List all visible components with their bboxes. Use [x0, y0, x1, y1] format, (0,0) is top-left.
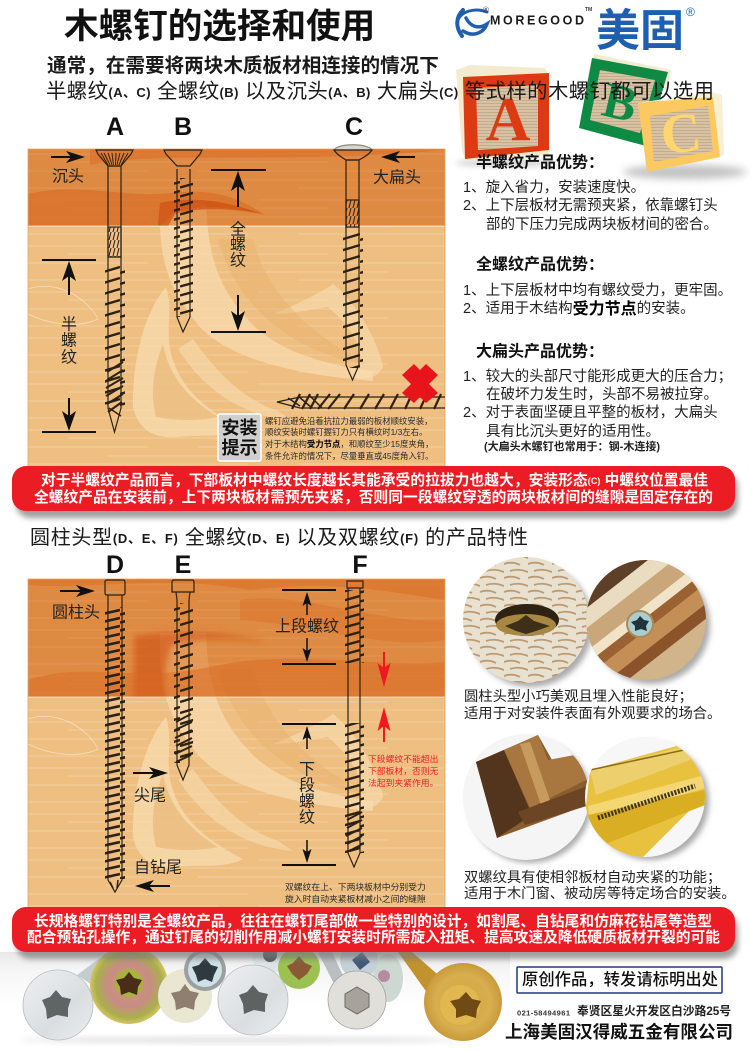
text: flat head advantages: 在破坏力发生时，头部不易被拉穿。 — [486, 386, 718, 403]
photo: screw in plywood — [586, 560, 714, 688]
screw head: back blue silver — [340, 941, 378, 979]
screw labels D E F: E — [175, 551, 191, 579]
callout: sharp tip — [133, 767, 168, 804]
photo: assorted screw heads — [0, 937, 510, 1043]
horizontal screw (wrong installation) — [277, 394, 445, 409]
text: install tip: 条件允许的情况下，尽量垂直或45度角入钉。 — [265, 451, 433, 461]
text: half thread advantages: 部的下压力完成两块板材间的密合。 — [486, 215, 718, 233]
callout: cylinder head — [52, 585, 100, 622]
text: half thread advantages: 2、上下层板材无需预夹紧，依靠螺钉头 — [463, 196, 718, 214]
dimension: half thread: 纹 — [61, 348, 77, 366]
text: half thread advantages — [463, 152, 718, 233]
section heading 2: 圆柱头型(D、E、F) 全螺纹(D、E) 以及双螺纹(F) 的产品特性 — [30, 526, 528, 549]
screw C, flat head — [334, 145, 372, 380]
screw labels A B C — [106, 113, 363, 141]
text: double thread caption: 适用于木门窗、被动房等特定场合的安装。 — [464, 884, 736, 902]
text: red warning — [368, 753, 439, 788]
dimension: half thread: 半 — [61, 316, 77, 334]
icon: logo swirl — [457, 10, 487, 36]
illustration: toy alphabet blocks: A — [486, 86, 531, 154]
panel: wood diagram, cylinder head screws — [28, 579, 445, 909]
screw labels A B C: A — [106, 113, 124, 141]
icon: red cross — [402, 364, 438, 403]
arrows: red clamping arrows — [378, 652, 390, 742]
screw F, double thread — [345, 581, 364, 867]
screw: gold wafer head — [393, 945, 502, 1041]
screw head: hex socket — [328, 971, 386, 1029]
text: cylinder head caption — [464, 688, 721, 722]
screw E — [172, 580, 194, 780]
wood background — [28, 149, 445, 479]
text: flat head advantages: 1、较大的头部尺寸能形成更大的压合力； — [463, 367, 732, 385]
panel: wood diagram, countersunk and flat head screws — [28, 145, 445, 479]
screw head: silver yellow — [158, 969, 212, 1023]
wood background — [28, 579, 445, 909]
photo: wooden frame corner — [463, 734, 592, 863]
dimension: lower thread: 段 — [299, 776, 315, 794]
block B — [579, 54, 671, 146]
screw head: small green — [278, 947, 320, 989]
text: flat head advantages — [463, 342, 732, 453]
callout banner: thread notes — [12, 466, 738, 518]
illustration: toy alphabet blocks — [455, 54, 747, 179]
dimension: upper thread — [275, 590, 339, 664]
text: flat head advantages: 2、对于表面坚硬且平整的板材，大扁头 — [463, 403, 718, 421]
callout: flat head arrow — [373, 151, 421, 186]
text: company contact — [505, 1004, 733, 1042]
text: full thread advantages — [463, 254, 732, 318]
title: 木螺钉的选择和使用 — [64, 8, 375, 46]
screw head: silver left — [23, 970, 93, 1040]
text: double thread note — [285, 881, 426, 904]
text: cylinder head caption: 圆柱头型小巧美观且埋入性能良好； — [464, 688, 693, 705]
screw D — [105, 580, 125, 892]
text: full thread advantages: 全螺纹产品优势： — [476, 254, 604, 274]
callout: cylinder head: 圆柱头 — [52, 604, 100, 622]
screw labels A B C: C — [345, 113, 363, 141]
dimension: full thread: 全 — [230, 220, 246, 238]
logo Chinese name: 美固 — [596, 6, 684, 56]
screw head: back green silver — [373, 954, 403, 1002]
callout: countersunk arrow — [51, 151, 85, 186]
logo registered mark small: ® — [483, 6, 489, 14]
dimension: full thread: 纹 — [230, 252, 246, 270]
photo: yellow timber with double thread screw — [585, 737, 709, 860]
screw head: back silver — [252, 937, 288, 973]
logo: Moregood — [457, 5, 695, 56]
block A — [456, 65, 549, 160]
text: red warning: 下部板材，否则无 — [368, 765, 439, 776]
callout banner: long screw notes: 长规格螺钉特别是全螺纹产品，往往在螺钉尾部做一些特别的设计，如割尾、自钻尾和仿麻花钻尾等造型 — [34, 912, 712, 930]
photo: recessed screw in cream wood — [463, 557, 593, 687]
callout: countersunk arrow: 沉头 — [52, 168, 84, 186]
text: full thread advantages: 2、适用于木结构受力节点的安装。 — [463, 298, 695, 318]
screw labels D E F: F — [352, 551, 368, 579]
dimension: full thread: 螺 — [230, 236, 246, 254]
intro line 2: 半螺纹(A、C) 全螺纹(B) 以及沉头(A、B) 大扁头(C) 等式样的木螺钉都可以选用 — [46, 80, 714, 103]
text: half thread advantages: 半螺纹产品优势： — [476, 152, 604, 172]
dimension: upper thread: 上段螺纹 — [275, 618, 339, 636]
callout: flat head arrow: 大扁头 — [373, 168, 421, 186]
callout: sharp tip: 尖尾 — [134, 786, 166, 804]
text: double thread note: 双螺纹在上、下两块板材中分别受力 — [285, 881, 426, 892]
callout: self-drilling tip — [134, 858, 182, 892]
dimension: lower thread: 螺 — [299, 792, 315, 810]
screw labels D E F — [106, 551, 368, 579]
callout banner: thread notes: 对于半螺纹产品而言，下部板材中螺纹长度越长其能承受的拉拔力也越大，安装形态(C) 中螺纹位置最佳 — [41, 471, 708, 489]
text: cylinder head caption: 适用于对安装件表面有外观要求的场合。 — [464, 705, 721, 722]
text: half thread advantages: 1、旋入省力，安装速度快。 — [463, 179, 645, 196]
logo registered mark: ® — [686, 5, 695, 19]
dimension: lower thread — [282, 724, 336, 865]
callout: install tip badge: 提示 — [222, 437, 258, 458]
text: double thread note: 旋入时自动夹紧板材减小之间的缝隙 — [285, 893, 426, 904]
text: red warning: 法起到夹紧作用。 — [368, 777, 438, 788]
text: double thread caption — [464, 869, 736, 902]
callout banner: long screw notes — [12, 907, 738, 959]
text: install tip — [265, 416, 433, 461]
block C: C — [658, 101, 704, 167]
intro line: 通常，在需要将两块木质板材相连接的情况下 — [47, 54, 439, 77]
text: red warning: 下段螺纹不能超出 — [368, 753, 438, 764]
screw head: silver center — [218, 965, 288, 1035]
text: company contact: 奉贤区星火开发区白沙路25号 — [577, 1004, 731, 1018]
block B: B — [597, 71, 643, 133]
dimension: lower thread: 下 — [299, 762, 315, 778]
logo wordmark: MOREGOOD — [490, 14, 584, 28]
callout: install tip badge: 安装 — [222, 418, 258, 438]
callout: self-drilling tip: 自钻尾 — [134, 858, 182, 876]
screw labels D E F: D — [106, 551, 124, 579]
block C — [637, 92, 724, 172]
dimension: lower thread: 纹 — [299, 808, 315, 826]
text: flat head advantages: 大扁头产品优势： — [476, 342, 604, 360]
notice: original work — [517, 967, 722, 993]
text: flat head advantages: (大扁头木螺钉也常用于：钢-木连接) — [484, 439, 660, 453]
text: flat head advantages: 具有比沉头更好的适用性。 — [486, 423, 660, 440]
screw head: yellow-green — [90, 946, 168, 1024]
callout: install tip badge — [218, 414, 261, 461]
callout banner: long screw notes: 配合预钻孔操作，通过钉尾的切削作用减小螺钉安装时所需旋入扭矩、提高攻速及降低硬质板材开裂的可能 — [27, 928, 720, 946]
text: install tip: 对于木结构受力节点，和顺纹至少15度夹角， — [265, 439, 433, 449]
dimension: half thread — [42, 260, 96, 432]
text: install tip: 顺纹安装时螺钉握钉力只有横纹时1/3左右。 — [265, 427, 427, 437]
logo trademark: TM — [585, 7, 592, 13]
screw labels A B C: B — [174, 113, 192, 141]
dimension: full thread — [211, 170, 266, 332]
dimension: half thread: 螺 — [61, 332, 77, 350]
screw B — [164, 150, 202, 332]
screw head: small silver — [184, 949, 226, 991]
text: install tip: 螺钉应避免沿着抗拉力最弱的板材顺纹安装， — [265, 416, 432, 426]
text: company contact: 上海美固汉得威五金有限公司 — [505, 1022, 733, 1042]
screw A — [96, 150, 133, 432]
callout banner: thread notes: 全螺纹产品在安装前，上下两块板材需预先夹紧，否则同一段螺纹穿透的两块板材间的缝隙是固定存在的 — [34, 488, 713, 506]
text: full thread advantages: 1、上下层板材中均有螺纹受力，更牢固。 — [463, 281, 732, 299]
notice: original work: 原创作品，转发请标明出处 — [522, 971, 718, 989]
text: company contact: 021-58494961 — [517, 1008, 570, 1018]
text: double thread caption: 双螺纹具有使相邻板材自动夹紧的功能； — [464, 869, 721, 886]
